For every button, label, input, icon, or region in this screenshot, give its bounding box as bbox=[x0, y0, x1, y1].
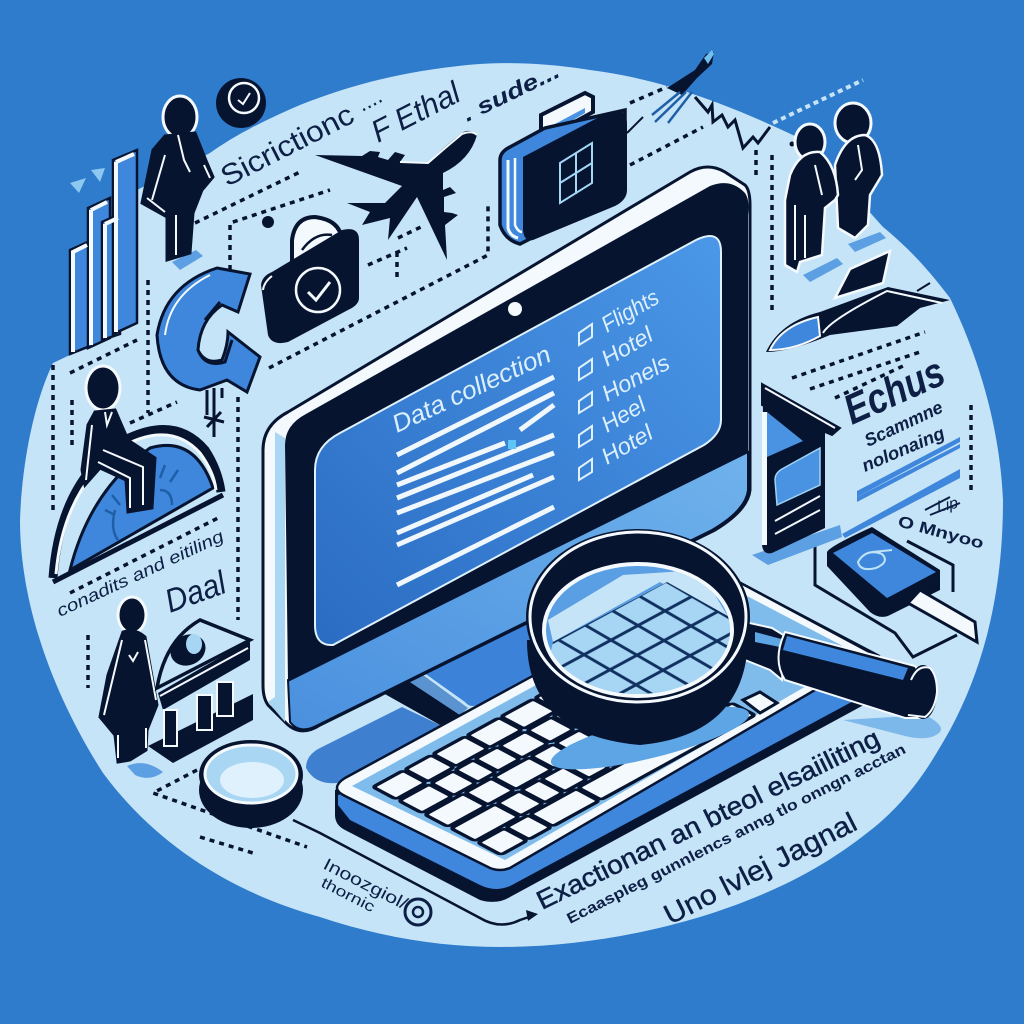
caption: bottom left bbox=[318, 855, 431, 925]
people pair icon bbox=[785, 103, 886, 282]
handle bbox=[745, 622, 937, 719]
monitor bbox=[263, 167, 750, 731]
magnifier shadow bbox=[546, 694, 754, 782]
keyboard bbox=[335, 572, 895, 902]
blue C arrow icon bbox=[157, 268, 260, 437]
bar chart bbox=[70, 150, 137, 354]
pedestal icon bbox=[148, 620, 253, 763]
small triangles bbox=[70, 168, 105, 193]
person top left bbox=[142, 96, 213, 270]
lens ring bbox=[526, 529, 750, 705]
lens keys bbox=[548, 572, 730, 694]
kiosk icon bbox=[752, 384, 842, 565]
usb device bbox=[815, 527, 977, 657]
label: sude: . sude... bbox=[458, 58, 564, 126]
handle shadow bbox=[843, 715, 941, 738]
checklist: Hotel bbox=[596, 419, 658, 469]
heading: F Ethal: F Ethal bbox=[365, 74, 467, 149]
bottom caption line 2: Ecaaspleg gunnlencs anng tlo onngn acctan bbox=[564, 741, 909, 928]
caption: bottom left: thornic bbox=[318, 874, 378, 916]
blue stripes bbox=[842, 437, 960, 538]
caption: nolonaing: nolonaing bbox=[859, 423, 948, 476]
screen marker bbox=[508, 440, 516, 449]
small caption right bbox=[896, 495, 986, 553]
screen text lines bbox=[397, 377, 554, 585]
shuttle icon bbox=[766, 251, 950, 352]
keyboard keys bbox=[373, 647, 755, 855]
heading: Daal: Daal bbox=[160, 563, 232, 620]
checklist: Honels bbox=[597, 349, 674, 406]
airplane icon bbox=[315, 131, 477, 260]
check badge bbox=[216, 78, 266, 128]
checklist: Flights bbox=[596, 284, 664, 337]
caption: Scammne: Scammne bbox=[861, 397, 946, 451]
bottom caption line 3: Uno lvlej Jagnal bbox=[659, 806, 862, 930]
lens glass bbox=[544, 564, 732, 696]
heading: Sicrictionc: Sicrictionc bbox=[216, 99, 359, 193]
airplane highlight bbox=[400, 132, 477, 163]
arch with seated person bbox=[53, 366, 223, 582]
checklist: Hotel bbox=[596, 321, 658, 371]
heading: Echus: Echus bbox=[837, 348, 952, 433]
caption: conditions: conadits and eitiling bbox=[54, 526, 227, 621]
dotted connector lines bbox=[53, 80, 971, 925]
briefcase icon bbox=[500, 93, 627, 244]
checklist: Heel bbox=[596, 391, 651, 437]
lens barrel bbox=[527, 640, 748, 745]
small caption right: O Mnyoo bbox=[896, 513, 986, 553]
keyboard base bbox=[335, 572, 895, 902]
screen heading: Data collection: Data collection bbox=[388, 340, 555, 438]
checklist bbox=[579, 284, 674, 480]
heading dashes: .... bbox=[353, 83, 386, 116]
keyboard extra key bbox=[743, 692, 777, 713]
small caption right: Lip bbox=[935, 495, 960, 516]
area behind stand bbox=[420, 610, 535, 706]
desk shadow bbox=[306, 707, 440, 783]
small lens bbox=[199, 740, 303, 828]
monitor stand bbox=[383, 675, 468, 725]
lock bag icon bbox=[261, 217, 359, 343]
bottom caption line 1: Exactionan an bteol elsaiiliting bbox=[531, 723, 884, 915]
caption: bottom left: Inoozgiol/ bbox=[320, 855, 411, 913]
person lower left bbox=[100, 597, 163, 778]
magnifying glass bbox=[526, 529, 941, 782]
rocket icon bbox=[652, 50, 714, 123]
